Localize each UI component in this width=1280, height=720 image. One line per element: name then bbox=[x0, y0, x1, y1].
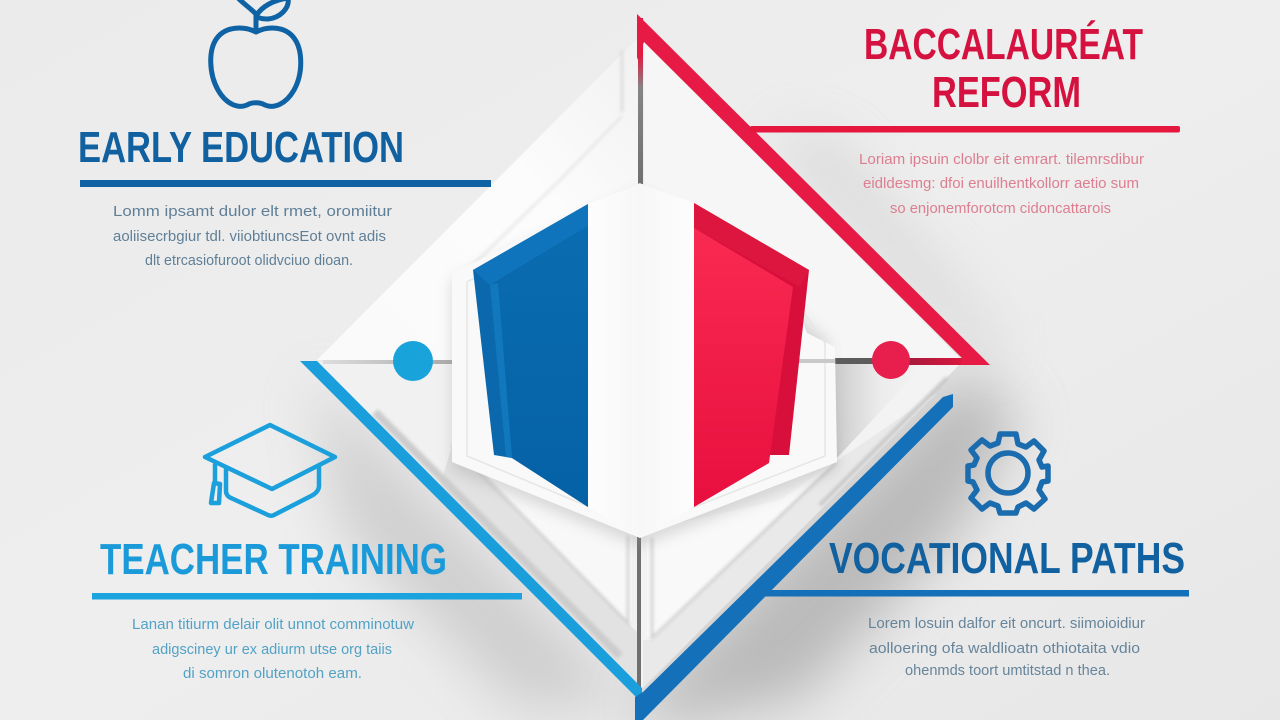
heading: TEACHER TRAINING bbox=[100, 535, 447, 584]
lower right plate bbox=[647, 460, 837, 637]
panel: early education bbox=[78, 0, 491, 269]
body text bbox=[132, 616, 414, 682]
red highlight edge bbox=[694, 203, 809, 287]
horizontal seam right bbox=[835, 358, 895, 364]
hexagon seam shadow bbox=[795, 359, 835, 363]
body text: Lomm ipsamt dulor elt rmet, oromiitur bbox=[113, 203, 392, 220]
diamond lower left panel bbox=[317, 362, 640, 690]
heading: REFORM bbox=[932, 68, 1081, 117]
rule bbox=[80, 180, 491, 187]
heading: VOCATIONAL PATHS bbox=[829, 534, 1185, 583]
red connector dot bbox=[872, 341, 910, 379]
diamond upper left panel bbox=[317, 36, 640, 360]
diamond upper right panel bbox=[644, 42, 962, 360]
panel: teacher training bbox=[92, 425, 522, 682]
red seam right bbox=[905, 358, 975, 365]
French flag book bbox=[473, 184, 809, 536]
body text bbox=[113, 203, 392, 269]
hexagon bevel bbox=[467, 192, 825, 528]
horizontal seam left bbox=[323, 360, 453, 364]
heading: BACCALAURÉAT bbox=[864, 19, 1143, 69]
body text: Loriam ipsuin clolbr eit emrart. tilemrsdibur bbox=[859, 151, 1144, 168]
vertical seam top bbox=[638, 18, 643, 184]
icon: apple bbox=[211, 0, 301, 106]
lower left plate bbox=[452, 440, 632, 621]
inner bevel lines bbox=[375, 50, 947, 656]
central diamond bbox=[312, 18, 1020, 720]
rule bbox=[750, 126, 1180, 132]
body text: aoliisecrbgiur tdl. viiobtiuncsEot ovnt adis bbox=[113, 228, 386, 245]
white band bbox=[588, 184, 694, 536]
dark blue diamond border bbox=[635, 394, 953, 720]
body text: di somron olutenotoh eam. bbox=[183, 665, 362, 682]
body text: so enjonemforotcm cidoncattarois bbox=[890, 200, 1111, 217]
body text: dlt etrcasiofuroot olidvciuo dioan. bbox=[145, 252, 353, 269]
lower right plate shadow bbox=[835, 364, 925, 460]
red spine side bbox=[694, 203, 809, 507]
heading: EARLY EDUCATION bbox=[78, 123, 404, 172]
heading bbox=[864, 19, 1143, 117]
lower right band bbox=[643, 392, 938, 688]
body text bbox=[868, 615, 1145, 679]
panel: vocational paths bbox=[765, 434, 1189, 679]
icon: graduation cap bbox=[205, 425, 335, 516]
red cover bbox=[694, 228, 793, 507]
blue connector dot bbox=[393, 341, 433, 381]
diamond drop shadows bbox=[312, 135, 1020, 720]
light blue diamond border bbox=[300, 361, 642, 698]
body text: eidldesmg: dfoi enuilhentkollorr aetio sum bbox=[863, 175, 1139, 192]
body text: adigsciney ur ex adiurm utse org taiis bbox=[152, 641, 392, 658]
body text: Lorem losuin dalfor eit oncurt. siimoioidiur bbox=[868, 615, 1145, 632]
body text bbox=[859, 151, 1144, 217]
blue spine side bbox=[473, 204, 588, 507]
body text: ohenmds toort umtitstad n thea. bbox=[905, 662, 1110, 679]
blue cover bbox=[498, 226, 588, 507]
hexagon shadow bbox=[452, 190, 838, 546]
panel: baccalaureat reform bbox=[750, 19, 1180, 217]
hexagon outer plate bbox=[452, 183, 837, 538]
body text: Lanan titiurm delair olit unnot comminotuw bbox=[132, 616, 414, 633]
body text: aolloering ofa waldlioatn othiotaita vdio bbox=[869, 640, 1140, 657]
rule bbox=[765, 590, 1189, 596]
rule bbox=[92, 593, 522, 600]
central hexagon bbox=[452, 183, 838, 546]
icon: gear bbox=[968, 434, 1048, 513]
red diamond border bbox=[637, 14, 990, 365]
blue inner fold bbox=[490, 283, 512, 458]
lower left band bbox=[440, 445, 637, 684]
diamond lower right panel bbox=[640, 364, 960, 690]
vertical seam bottom bbox=[637, 536, 641, 690]
blue highlight edge bbox=[473, 204, 588, 285]
